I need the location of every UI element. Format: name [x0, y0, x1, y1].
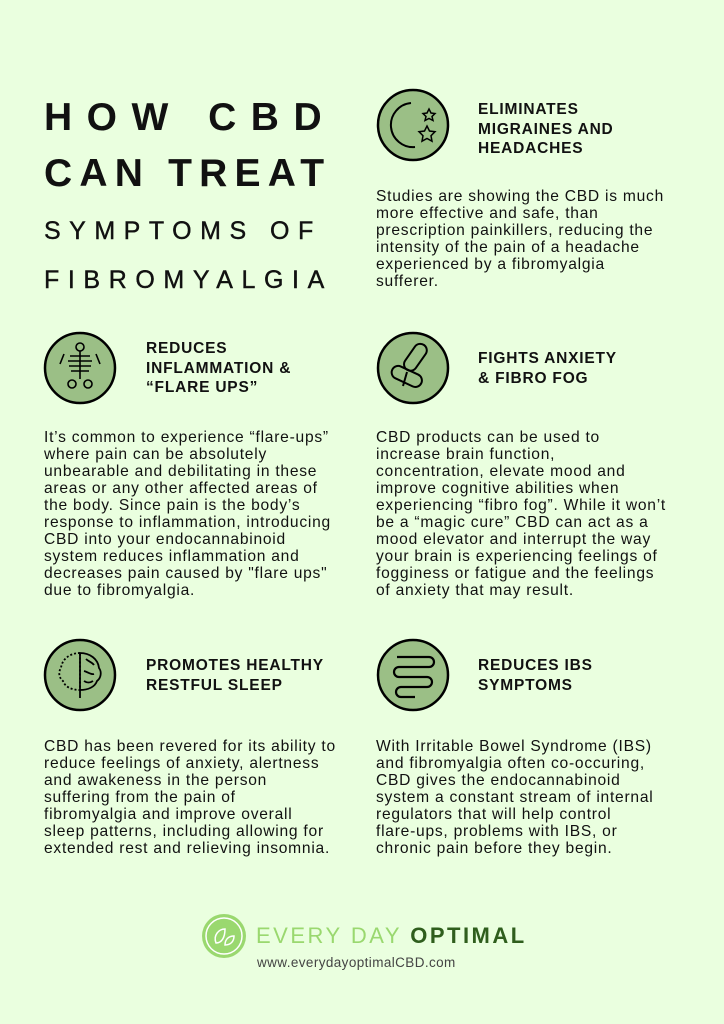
icon: skeleton [44, 332, 116, 404]
text: IBS: regulators that will help control [376, 806, 611, 823]
heading: inflammation [146, 340, 291, 396]
heading: migraines [478, 101, 614, 157]
url: www.everydayoptimalCBD.com [257, 955, 456, 970]
heading: sleep: RESTFUL SLEEP [146, 676, 283, 694]
text: anxiety: improve cognitive abilities when [376, 480, 619, 497]
text: inflammation: areas or any other affected areas of [44, 480, 318, 497]
text: IBS: system a constant stream of internal [376, 789, 653, 806]
text: anxiety: of anxiety that may result. [376, 582, 574, 599]
text: sleep: reduce feelings of anxiety, alertness [44, 755, 319, 772]
heading: IBS: SYMPTOMS [478, 676, 573, 694]
text: anxiety: concentration, elevate mood and [376, 463, 626, 480]
text: inflammation: It’s common to experience “flare-ups” [44, 429, 329, 446]
text: IBS: chronic pain before they begin. [376, 840, 613, 857]
text: anxiety: your brain is experiencing feelings of [376, 548, 658, 565]
text: sleep: and awakeness in the person [44, 772, 267, 789]
text: inflammation [44, 429, 331, 599]
text: IBS: CBD gives the endocannabinoid [376, 772, 621, 789]
heading: inflammation: INFLAMMATION & [146, 360, 291, 376]
heading: migraines: HEADACHES [478, 140, 583, 157]
text: sleep: sleep patterns, including allowing for [44, 823, 324, 840]
text: migraines: more effective and safe, than [376, 205, 599, 222]
icon: moon [376, 88, 450, 162]
heading: migraines: ELIMINATES [478, 101, 579, 118]
text: sleep: fibromyalgia and improve overall [44, 806, 292, 823]
text: anxiety: mood elevator and interrupt the way [376, 531, 651, 548]
text: anxiety: CBD products can be used to [376, 429, 600, 446]
text: migraines [376, 188, 664, 290]
heading: sleep [146, 657, 324, 694]
icon: intestine [376, 638, 450, 712]
heading: migraines: MIGRAINES AND [478, 120, 614, 138]
icon: leaf logo [202, 914, 246, 958]
heading: anxiety [478, 350, 617, 386]
heading: anxiety: & FIBRO FOG [478, 370, 588, 386]
text: migraines: experienced by a fibromyalgia [376, 256, 605, 273]
text: sleep: CBD has been revered for its ability to [44, 738, 336, 755]
icon: brain [44, 638, 116, 712]
heading: inflammation: “FLARE UPS” [146, 379, 258, 396]
text: IBS: With Irritable Bowel Syndrome (IBS) [376, 738, 652, 755]
text: IBS [376, 738, 653, 857]
text: migraines: sufferer. [376, 273, 439, 290]
title [44, 96, 336, 294]
text: anxiety: increase brain function, [376, 446, 555, 463]
heading: IBS: REDUCES IBS [478, 657, 593, 674]
text: inflammation: the body. Since pain is the body’s [44, 497, 300, 514]
heading: sleep: PROMOTES HEALTHY [146, 657, 324, 674]
text: sleep [44, 738, 336, 857]
text: migraines: intensity of the pain of a headache [376, 239, 640, 256]
icon: pills [376, 332, 450, 404]
text: IBS: and fibromyalgia often co-occuring, [376, 755, 645, 772]
text: sleep: suffering from the pain of [44, 789, 236, 806]
title: SYMPTOMS OF [44, 217, 322, 245]
title: FIBROMYALGIA [44, 266, 333, 294]
text: sleep: extended rest and relieving insomnia. [44, 840, 330, 857]
heading: anxiety: FIGHTS ANXIETY [478, 350, 617, 367]
title: HOW CBD [44, 96, 336, 139]
brand name: EVERY DAY OPTIMAL [256, 923, 527, 948]
text: inflammation: unbearable and debilitating in these [44, 463, 317, 480]
logo [202, 914, 527, 970]
title: CAN TREAT [44, 152, 331, 195]
text: migraines: prescription painkillers, reducing the [376, 222, 653, 239]
text: inflammation: CBD into your endocannabinoid [44, 531, 286, 548]
text: inflammation: system reduces inflammation and [44, 548, 300, 565]
text: anxiety: experiencing “fibro fog”. While it won’t [376, 497, 666, 514]
text: inflammation: decreases pain caused by "flare ups" [44, 565, 327, 582]
text: anxiety: fogginess or fatigue and the feelings [376, 565, 654, 582]
heading: IBS [478, 657, 593, 694]
text: inflammation: response to inflammation, introducing [44, 514, 331, 531]
text: anxiety: be a “magic cure” CBD can act as a [376, 514, 649, 531]
text: migraines: Studies are showing the CBD is much [376, 188, 664, 205]
heading: inflammation: REDUCES [146, 340, 227, 357]
text: inflammation: due to fibromyalgia. [44, 582, 195, 599]
text: inflammation: where pain can be absolutely [44, 446, 267, 463]
text: anxiety [376, 429, 666, 599]
text: IBS: flare-ups, problems with IBS, or [376, 823, 618, 840]
